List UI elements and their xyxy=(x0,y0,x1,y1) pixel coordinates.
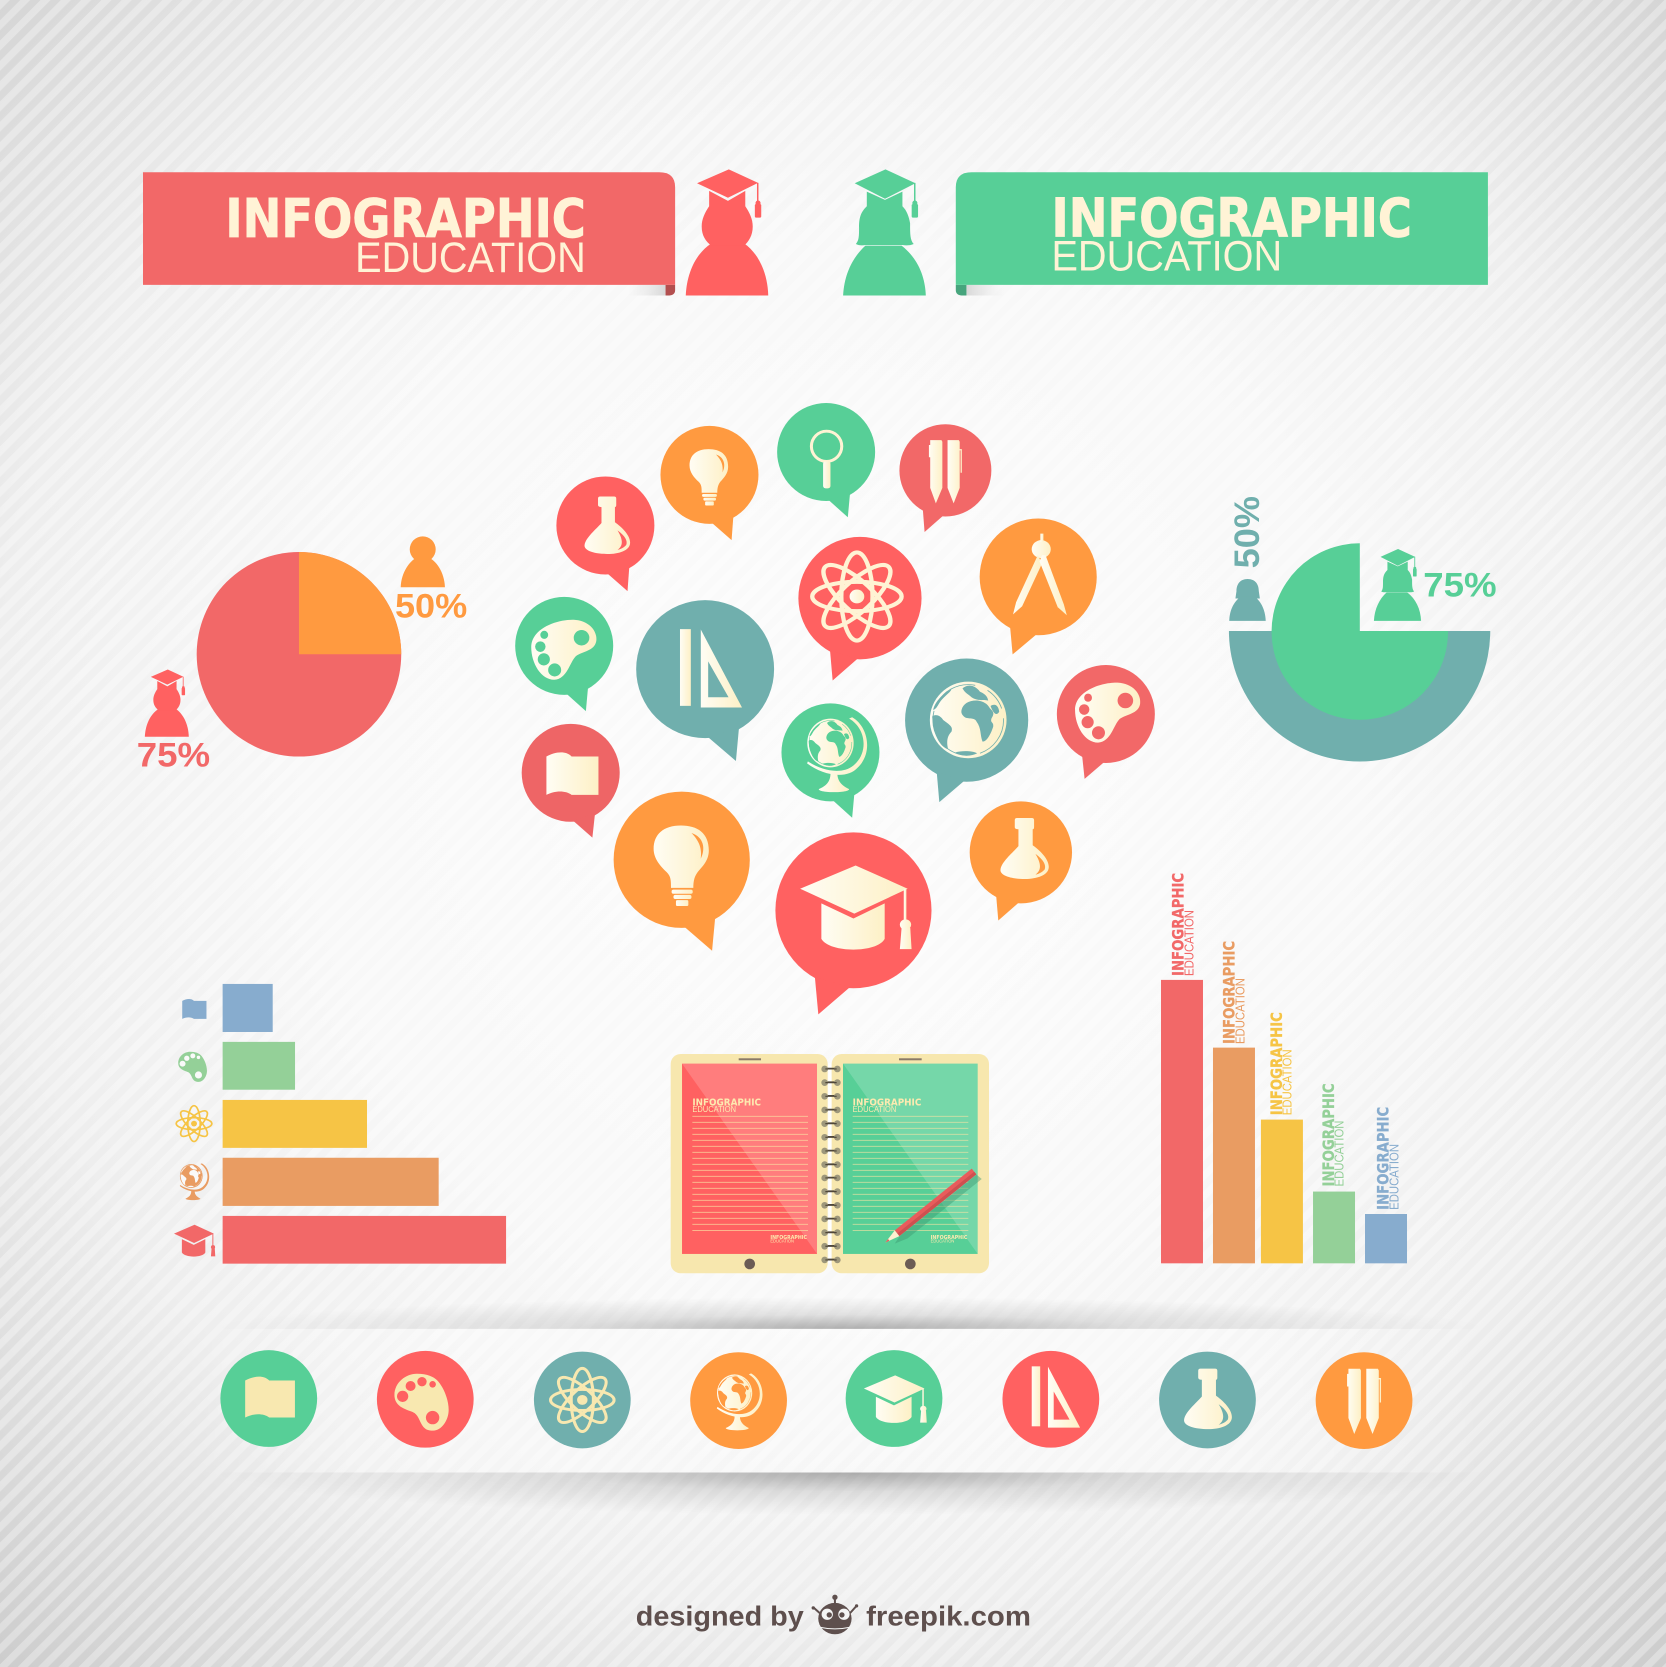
circle icon: palette xyxy=(377,1351,474,1448)
shelf shadow bottom xyxy=(336,1472,1361,1507)
tablet text right: EDUCATION xyxy=(853,1104,896,1114)
circle icon: pens xyxy=(1316,1352,1412,1449)
icon: freepik robot xyxy=(812,1595,858,1634)
bubble: earth xyxy=(905,659,1028,802)
tablet text right: INFOGRAPHIC xyxy=(931,1235,967,1241)
tablet text right: EDUCATION xyxy=(931,1238,954,1243)
icon: globe orange xyxy=(180,1163,209,1200)
icon: cap red xyxy=(174,1225,215,1257)
banner: green header xyxy=(956,172,1488,296)
tablet text right xyxy=(853,1098,967,1243)
label: bar 4: EDUCATION xyxy=(1332,1121,1347,1186)
circle icon: flask xyxy=(1159,1352,1256,1448)
bubble: palette red xyxy=(1057,665,1155,779)
icon: graduate red xyxy=(145,669,189,737)
bubble: large bulb xyxy=(614,792,750,951)
bubble: flask orange xyxy=(970,801,1072,921)
heading: red banner subtitle: EDUCATION xyxy=(355,235,586,282)
icon: female graduate xyxy=(843,169,926,296)
label: bar 3: EDUCATION xyxy=(1280,1049,1295,1115)
bubble: desk globe xyxy=(781,703,879,818)
tablet text left: EDUCATION xyxy=(770,1238,794,1243)
circle icon: book xyxy=(220,1350,317,1447)
shelf shadow top xyxy=(336,1303,1364,1329)
label: 75%: 75% xyxy=(137,737,210,775)
icon: student orange xyxy=(401,536,445,587)
bubble: atom xyxy=(798,537,922,681)
bubble: magnifier xyxy=(777,403,875,517)
tablet text left: EDUCATION xyxy=(692,1104,736,1114)
footer credit xyxy=(636,1595,1031,1634)
label: bar 4: INFOGRAPHIC xyxy=(1319,1083,1338,1186)
panel: speech bubble icon cluster xyxy=(515,403,1155,1014)
icon: pencil xyxy=(883,1168,982,1251)
heading: red banner title: INFOGRAPHIC xyxy=(225,188,586,250)
bubble: pens xyxy=(899,424,991,532)
chart: semicircle and three-quarter pie xyxy=(1229,543,1490,762)
panel: vertical bar chart xyxy=(1161,873,1407,1263)
shelf band xyxy=(191,1329,1488,1472)
label: bar 1 xyxy=(1169,873,1196,976)
label: 75% green: 75% xyxy=(1423,567,1497,605)
panel: right half-ring chart xyxy=(1228,496,1497,762)
spiral binding xyxy=(821,1063,841,1263)
label: bar 1: INFOGRAPHIC xyxy=(1169,873,1188,976)
label: bar 3: INFOGRAPHIC xyxy=(1267,1012,1286,1115)
label: 50%: 50% xyxy=(395,587,467,625)
heading: green banner subtitle: EDUCATION xyxy=(1051,234,1282,281)
pie chart xyxy=(197,552,401,757)
circle icon: globe xyxy=(690,1352,787,1449)
label: bar 2: EDUCATION xyxy=(1232,978,1247,1044)
panel: horizontal bar chart xyxy=(174,984,506,1264)
panel: notebook tablets xyxy=(671,1054,989,1273)
tablet text right: INFOGRAPHIC xyxy=(853,1098,921,1109)
bubble: graduation cap xyxy=(775,832,932,1014)
label: bar 5 xyxy=(1374,1107,1401,1210)
circle icon: cap xyxy=(846,1350,942,1447)
tablet: left xyxy=(671,1054,828,1273)
bubble: flask xyxy=(556,476,654,591)
circle icon: rulers xyxy=(1002,1351,1099,1448)
tablet: right xyxy=(832,1054,989,1273)
icon: atom yellow xyxy=(176,1106,212,1142)
banner: red header xyxy=(143,172,675,296)
tablet text left: INFOGRAPHIC xyxy=(692,1098,761,1109)
bubble: compass xyxy=(980,519,1097,654)
bubble: rulers xyxy=(636,600,774,761)
bubble: palette green xyxy=(515,597,613,711)
text: freepik.com: freepik.com xyxy=(866,1600,1031,1632)
label: bar 2: INFOGRAPHIC xyxy=(1220,941,1239,1044)
bars xyxy=(1161,980,1407,1263)
panel: icon shelf xyxy=(220,1303,1412,1507)
label: bar 5: INFOGRAPHIC xyxy=(1374,1107,1393,1210)
icon: student teal xyxy=(1229,579,1266,621)
label: bar 1: EDUCATION xyxy=(1181,910,1196,976)
icon: palette green xyxy=(178,1052,207,1082)
icon: book blue xyxy=(182,999,206,1019)
label: bar 5: EDUCATION xyxy=(1386,1144,1401,1210)
circle icon: atom xyxy=(534,1352,631,1448)
icon: graduate green xyxy=(1374,549,1421,621)
tablet text left: INFOGRAPHIC xyxy=(770,1235,807,1241)
label: bar 2 xyxy=(1220,941,1247,1044)
label: bar 3 xyxy=(1267,1012,1295,1115)
tablet text left xyxy=(692,1098,807,1243)
panel: left pie chart xyxy=(137,536,467,775)
icon: male graduate xyxy=(686,169,768,296)
label: vertical 50%: 50% xyxy=(1228,496,1267,568)
bubble: book xyxy=(522,724,620,838)
text: designed by: designed by xyxy=(636,1600,804,1632)
heading: green banner title: INFOGRAPHIC xyxy=(1051,188,1412,250)
label: bar 4 xyxy=(1319,1083,1347,1186)
bars xyxy=(223,984,506,1264)
bubble: light bulb xyxy=(660,426,758,540)
